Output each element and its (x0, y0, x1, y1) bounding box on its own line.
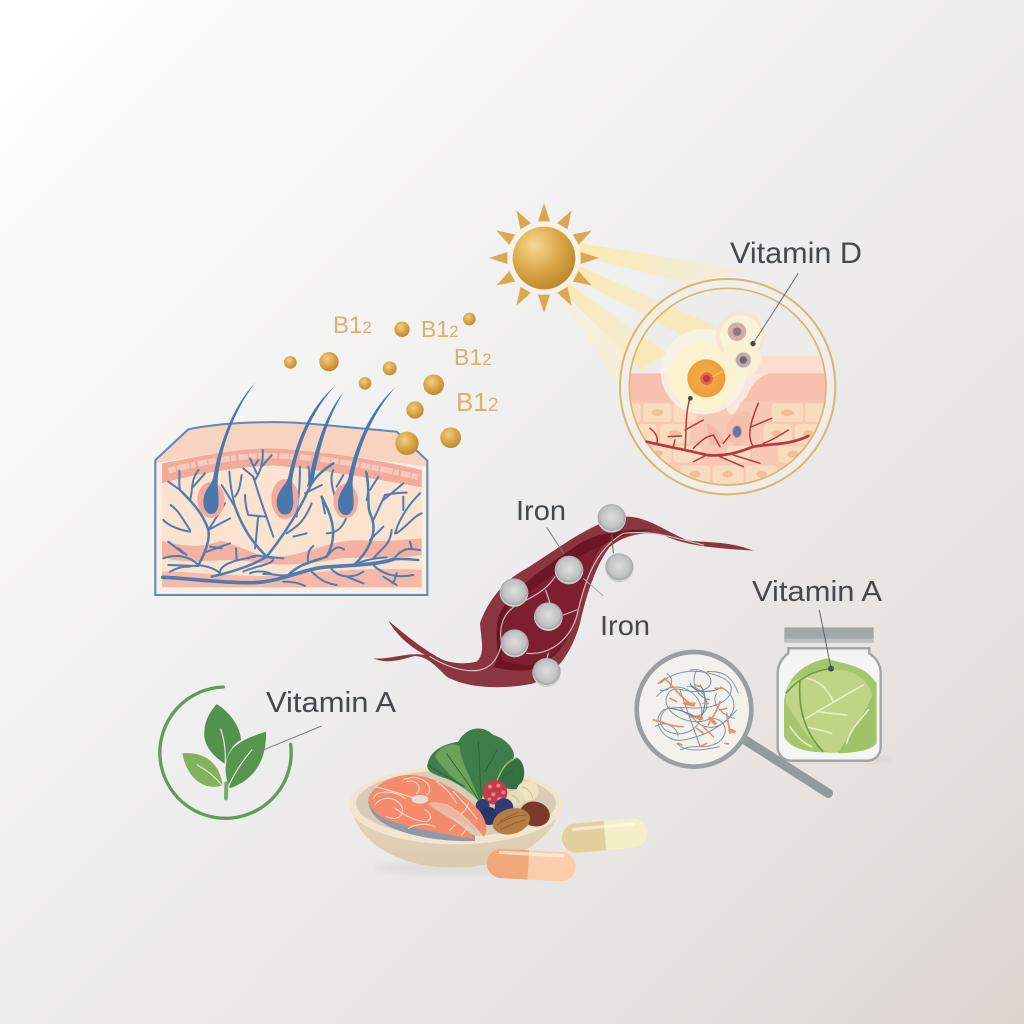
label: Vitamin A (jar) (752, 576, 883, 672)
large cell (661, 329, 746, 414)
icon: leaf in ring (160, 687, 322, 818)
B12 gold particles (284, 313, 476, 455)
B12 labels: B12 (456, 387, 498, 417)
Vitamin D leader line (750, 273, 798, 346)
bowl with salmon, greens, berries and nuts (349, 728, 563, 876)
icon: magnifying glass over fibres (637, 652, 828, 793)
hair follicles (197, 383, 395, 519)
red blood cell strand with iron (373, 504, 753, 687)
B12 labels: B12 (454, 344, 492, 370)
sun icon (489, 203, 599, 313)
capsule: yellow (561, 817, 648, 854)
salmon (368, 775, 486, 841)
panel: circular skin close-up (619, 273, 836, 496)
label: Vitamin D: Vitamin D (730, 237, 862, 270)
capsules (486, 817, 648, 882)
B12 labels: B12 (421, 316, 459, 342)
small cells (716, 311, 766, 378)
nuts and berries (476, 780, 553, 839)
B12 labels (333, 312, 498, 417)
B12 labels: B12 (333, 312, 372, 339)
blood vessels (647, 400, 808, 467)
panel: skin cross-section with hair follicles (155, 383, 427, 595)
label: Iron (upper): Iron (516, 495, 566, 526)
icon: jar with cabbage (778, 627, 893, 762)
iron spheres (500, 504, 634, 687)
greens (427, 728, 524, 802)
capillary network (163, 450, 422, 586)
label: Iron (lower): Iron (600, 610, 650, 641)
Iron leader lines (547, 527, 603, 596)
sunlight beams (560, 243, 747, 388)
capsule: orange (486, 848, 576, 882)
label: Vitamin A (jar): Vitamin A (752, 576, 883, 608)
label: Vitamin A (leaf): Vitamin A (266, 687, 397, 719)
